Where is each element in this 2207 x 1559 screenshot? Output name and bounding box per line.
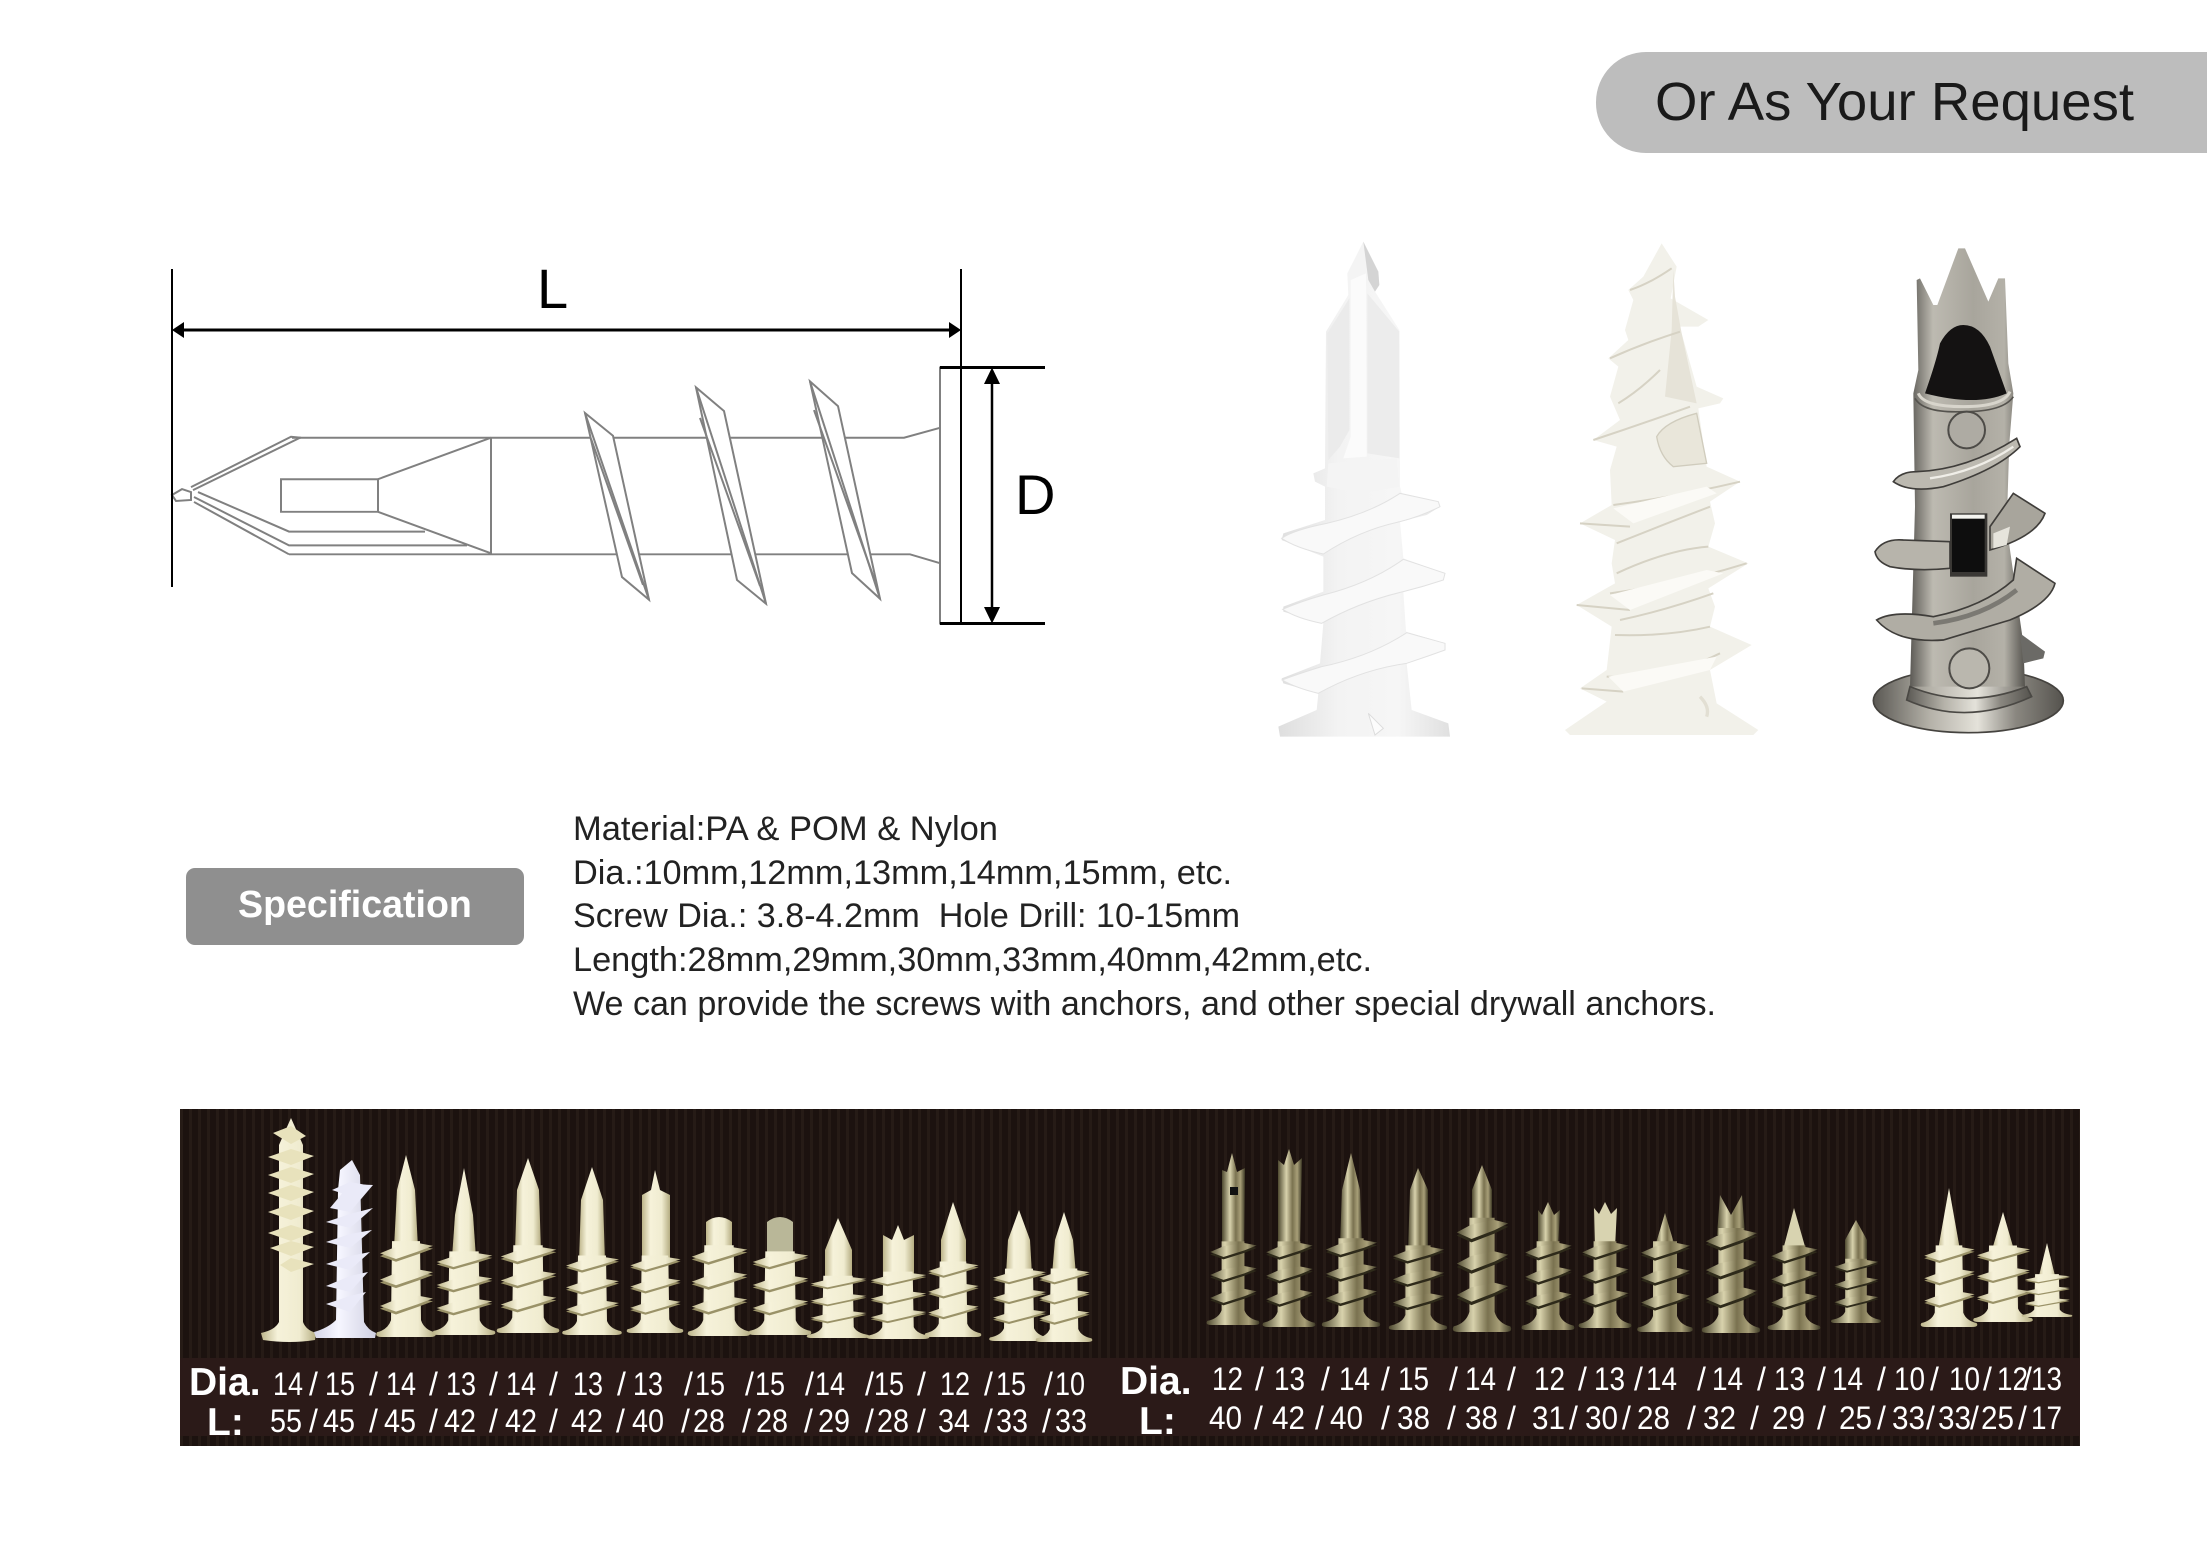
size labels left: /	[865, 1403, 874, 1439]
size labels left: /	[369, 1403, 378, 1439]
size labels right: /	[1817, 1400, 1826, 1436]
anchor outline	[172, 368, 961, 623]
photo: metal zinc anchor with crown tip	[1873, 248, 2063, 733]
size labels right: 38	[1397, 1400, 1430, 1436]
size labels left: /	[489, 1403, 498, 1439]
size labels right: 31	[1532, 1400, 1565, 1436]
size labels left: 14	[273, 1366, 303, 1402]
size labels right	[1120, 1360, 2062, 1443]
specification text: Dia.:10mm,12mm,13mm,14mm,15mm, etc.	[573, 854, 1232, 892]
technical drawing: anchor with L and D dimensions	[172, 257, 1055, 624]
anchor 2	[314, 1160, 376, 1338]
size labels right: /	[1381, 1361, 1390, 1397]
anchor 22	[1637, 1213, 1693, 1332]
anchor 14	[1036, 1212, 1092, 1342]
anchor 16	[1263, 1149, 1315, 1327]
specification label: Specification	[238, 883, 472, 925]
size labels right: 33	[1938, 1400, 1971, 1436]
size labels left: 33	[1055, 1403, 1087, 1439]
size labels left: 10	[1055, 1366, 1085, 1402]
size labels right: /	[1321, 1361, 1330, 1397]
size labels left: /	[549, 1403, 558, 1439]
size labels left: /	[616, 1403, 625, 1439]
dimension L: L	[537, 257, 568, 320]
anchor 1	[261, 1118, 316, 1342]
size labels right: /	[2023, 1361, 2032, 1397]
size labels left: /	[684, 1366, 693, 1402]
size labels left: /	[917, 1403, 926, 1439]
size labels right: 13	[1274, 1361, 1305, 1397]
size labels left: /	[917, 1366, 926, 1402]
size labels right: /	[1507, 1400, 1516, 1436]
size labels left: 15	[874, 1366, 904, 1402]
size labels right: 32	[1703, 1400, 1736, 1436]
size labels right: 13	[1594, 1361, 1625, 1397]
thread 2	[696, 387, 766, 604]
size labels left: /	[549, 1366, 558, 1402]
size labels right: 14	[1832, 1361, 1863, 1397]
size labels right: 29	[1772, 1400, 1805, 1436]
anchor 4	[433, 1168, 495, 1335]
size labels right: /	[1254, 1400, 1263, 1436]
anchor 3	[376, 1155, 436, 1337]
size labels right: 15	[1398, 1361, 1429, 1397]
size labels left: /	[617, 1366, 626, 1402]
size labels left: 13	[446, 1366, 476, 1402]
size labels right: 13	[2031, 1361, 2062, 1397]
size labels left: /	[804, 1403, 813, 1439]
specification text: Material:PA & POM & Nylon	[573, 810, 998, 848]
size labels right: /	[1381, 1400, 1390, 1436]
size labels right: /	[1970, 1400, 1979, 1436]
anchor 27	[1973, 1212, 2033, 1322]
size labels right: Dia.	[1120, 1360, 1192, 1403]
size labels right: /	[1877, 1361, 1886, 1397]
size labels right: /	[1569, 1400, 1578, 1436]
size labels left: 42	[444, 1403, 476, 1439]
specification text	[573, 810, 1716, 1023]
size labels left: /	[805, 1366, 814, 1402]
size labels right: 10	[1949, 1361, 1980, 1397]
size labels right: /	[1634, 1361, 1643, 1397]
size labels right: /	[1697, 1361, 1706, 1397]
anchor 13	[989, 1210, 1049, 1341]
size labels left: 12	[940, 1366, 970, 1402]
size labels left: 14	[506, 1366, 536, 1402]
size labels right: 38	[1465, 1400, 1498, 1436]
size labels left: /	[1044, 1366, 1053, 1402]
size labels left: 42	[571, 1403, 603, 1439]
anchor 24	[1768, 1208, 1820, 1330]
size labels left: 28	[756, 1403, 788, 1439]
anchor 21	[1579, 1202, 1631, 1328]
anchor 6	[562, 1167, 622, 1335]
size labels left: /	[742, 1403, 751, 1439]
anchor 25	[1831, 1220, 1881, 1323]
size labels left: 28	[877, 1403, 909, 1439]
size labels right: 14	[1646, 1361, 1677, 1397]
size labels right: /	[1447, 1400, 1456, 1436]
size labels left: 15	[325, 1366, 355, 1402]
badge: Or As Your Request	[1596, 52, 2207, 153]
anchor 5	[497, 1158, 559, 1333]
size labels right: /	[1757, 1361, 1766, 1397]
size labels right: /	[1926, 1400, 1935, 1436]
photo: white nylon anchor with straight tip	[1278, 242, 1450, 737]
size labels right: /	[1449, 1361, 1458, 1397]
anchor 17	[1322, 1153, 1380, 1327]
size labels left: 15	[755, 1366, 785, 1402]
size labels left: /	[745, 1366, 754, 1402]
anchor 23	[1702, 1195, 1760, 1333]
size labels left: /	[984, 1403, 993, 1439]
anchor 11	[867, 1225, 929, 1339]
dimension D	[940, 368, 1055, 624]
size labels right: /	[1817, 1361, 1826, 1397]
dimension L	[172, 257, 961, 624]
photo strip: anchor size range	[180, 1109, 2080, 1446]
size labels right: /	[1750, 1400, 1759, 1436]
anchor 7	[627, 1170, 683, 1333]
size labels left: L:	[207, 1401, 244, 1444]
size labels left: 28	[693, 1403, 725, 1439]
size labels right: 14	[1339, 1361, 1370, 1397]
size labels right: 40	[1209, 1400, 1242, 1436]
size labels right: /	[1983, 1361, 1992, 1397]
anchor 19	[1453, 1165, 1511, 1332]
thread 3	[810, 381, 880, 599]
size labels left: 13	[573, 1366, 603, 1402]
size labels left: /	[865, 1366, 874, 1402]
size labels right: 33	[1892, 1400, 1925, 1436]
size labels right: 13	[1774, 1361, 1805, 1397]
specification text: Length:28mm,29mm,30mm,33mm,40mm,42mm,etc.	[573, 941, 1372, 979]
size labels left: 29	[818, 1403, 850, 1439]
size labels right: /	[1578, 1361, 1587, 1397]
size labels right: /	[1930, 1361, 1939, 1397]
size labels right: /	[1315, 1400, 1324, 1436]
size labels right: /	[1255, 1361, 1264, 1397]
size labels left: /	[369, 1366, 378, 1402]
size labels right: 42	[1272, 1400, 1305, 1436]
size labels right: 17	[2031, 1400, 2062, 1436]
size labels left: /	[681, 1403, 690, 1439]
size labels right: L:	[1139, 1400, 1176, 1443]
specification label	[186, 868, 524, 945]
size labels right: /	[1622, 1400, 1631, 1436]
size labels right: 14	[1465, 1361, 1496, 1397]
size labels right: /	[1507, 1361, 1516, 1397]
size labels right: 30	[1585, 1400, 1618, 1436]
anchor 8	[688, 1217, 750, 1336]
size labels right: 12	[1534, 1361, 1565, 1397]
size labels left: /	[309, 1403, 318, 1439]
size labels left: /	[984, 1366, 993, 1402]
size labels right: 25	[1839, 1400, 1872, 1436]
size labels right: /	[1687, 1400, 1696, 1436]
anchor 9	[749, 1217, 811, 1335]
anchor 15	[1207, 1153, 1259, 1325]
size labels left: /	[309, 1366, 318, 1402]
size labels left: 42	[505, 1403, 537, 1439]
specification text: We can provide the screws with anchors, and other special drywall anchors.	[573, 985, 1716, 1023]
specification text: Screw Dia.: 3.8-4.2mm Hole Drill: 10-15mm	[573, 897, 1240, 935]
anchor 12	[925, 1202, 981, 1337]
anchor 10	[807, 1218, 869, 1338]
size labels left: 15	[695, 1366, 725, 1402]
size labels left: /	[1042, 1403, 1051, 1439]
size labels left: 15	[996, 1366, 1026, 1402]
anchor 18	[1389, 1168, 1447, 1330]
size labels left: 34	[938, 1403, 970, 1439]
size labels right: 28	[1637, 1400, 1670, 1436]
size labels right: 10	[1894, 1361, 1925, 1397]
size labels right: 12	[1997, 1361, 2028, 1397]
size labels left: Dia.	[189, 1361, 261, 1404]
thread 1	[585, 413, 649, 600]
size labels right: 40	[1330, 1400, 1363, 1436]
anchor 26	[1921, 1188, 1977, 1327]
plastic anchors row	[261, 1118, 1092, 1342]
anchor 20	[1522, 1202, 1574, 1330]
size labels left: 14	[815, 1366, 845, 1402]
size labels right: 12	[1212, 1361, 1243, 1397]
size labels left: 45	[384, 1403, 416, 1439]
size labels left: 55	[270, 1403, 302, 1439]
size labels left: /	[429, 1366, 438, 1402]
size labels right: /	[2018, 1400, 2027, 1436]
size labels left: 33	[996, 1403, 1028, 1439]
size labels left: 45	[323, 1403, 355, 1439]
size labels left: /	[429, 1403, 438, 1439]
anchor 28	[2022, 1243, 2072, 1317]
size labels right: 25	[1981, 1400, 2014, 1436]
size labels left: 40	[632, 1403, 664, 1439]
size labels left	[189, 1361, 1087, 1444]
metal anchors row	[1207, 1149, 2072, 1333]
size labels right: 14	[1712, 1361, 1743, 1397]
size labels left: 13	[633, 1366, 663, 1402]
badge: Or As Your Request: Or As Your Request	[1655, 73, 2134, 132]
size labels right: /	[1877, 1400, 1886, 1436]
size labels left: 14	[386, 1366, 416, 1402]
size labels left: /	[489, 1366, 498, 1402]
dimension D: D	[1015, 463, 1055, 526]
photo: white nylon spiral anchor	[1565, 243, 1758, 735]
